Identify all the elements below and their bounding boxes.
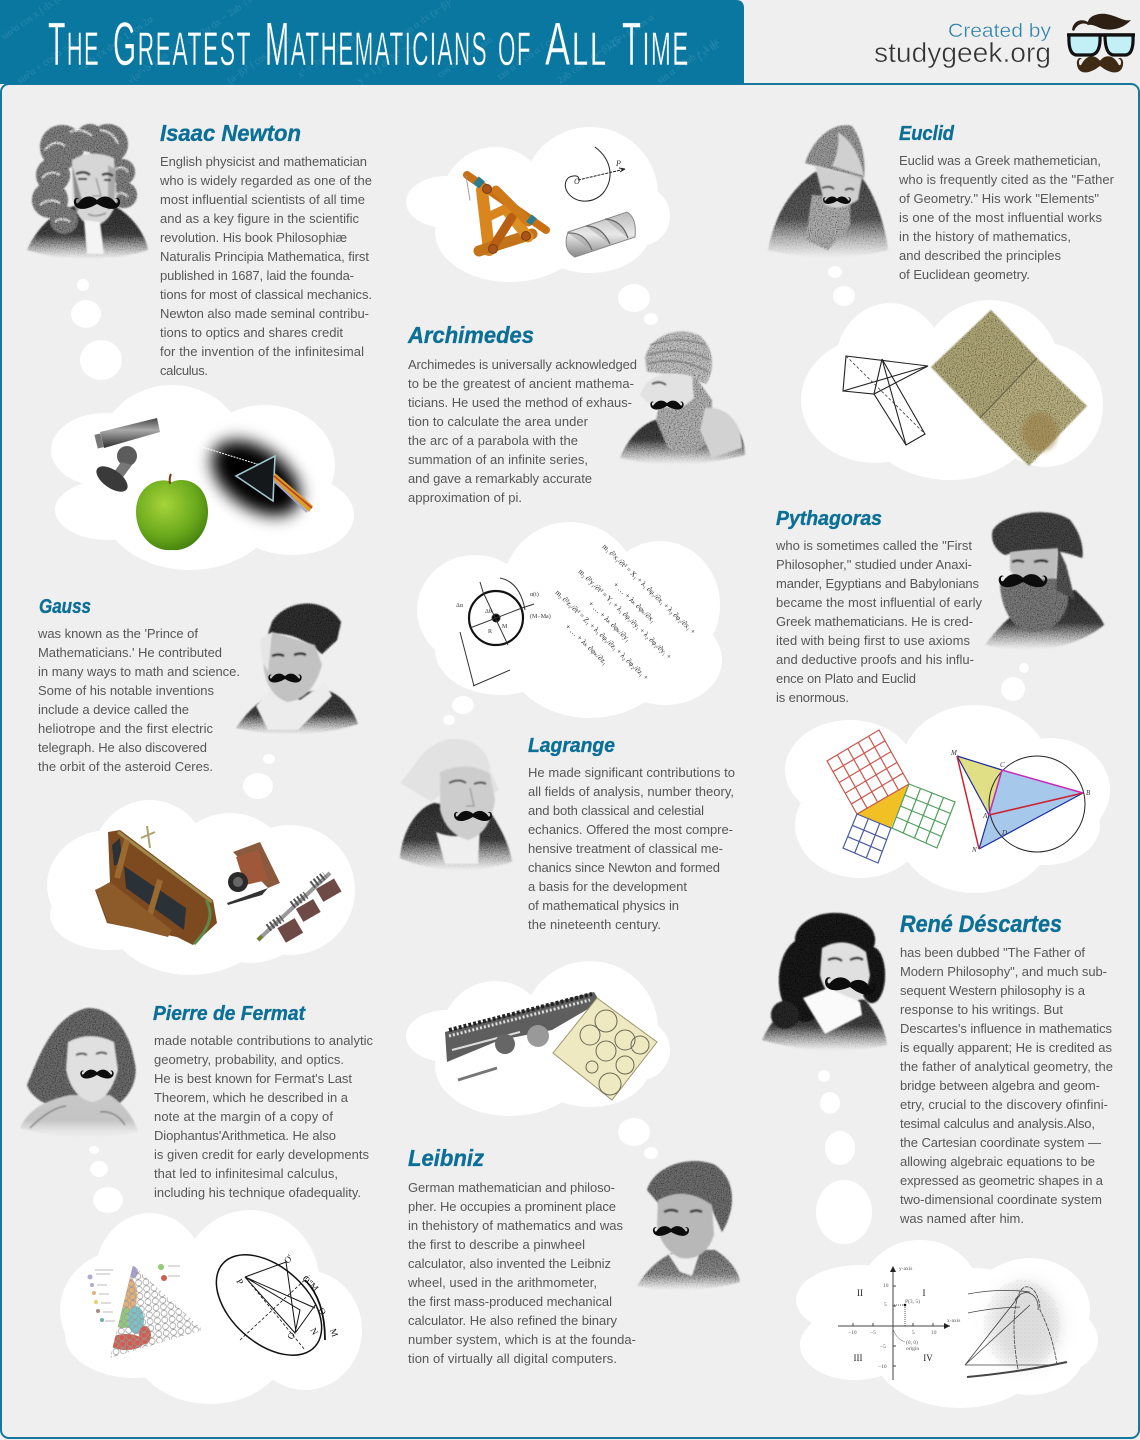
thought cloud: Newton (51, 385, 354, 570)
math texture: sin α − 2ab + 1 dx (655, 36, 721, 86)
text: Pythagoras: Philosopher," studied under Anaxi- (776, 557, 972, 572)
diagram: rotating disc (456, 578, 551, 686)
chart: coordinate plane: y-axis (899, 1266, 912, 1272)
text: Descartes: Modern Philosophy", and much sub- (900, 964, 1107, 979)
text: Newton: tions for most of classical mechanics. (160, 287, 372, 302)
text: Descartes: two-dimensional coordinate system (900, 1192, 1102, 1207)
math texture: √(a²+b²) sin x 25 (125, 39, 187, 86)
text: Euclid: Euclid was a Greek mathemetician, (899, 153, 1101, 168)
text: Descartes: etry, crucial to the discovery ofinfini- (900, 1097, 1108, 1112)
text: Archimedes: to be the greatest of ancient mathema- (408, 376, 634, 391)
thought cloud: equations of motion (417, 522, 722, 718)
header banner (0, 0, 744, 86)
title: OF (498, 22, 532, 75)
text: Fermat: note at the margin of a copy of (154, 1109, 333, 1124)
text: Lagrange (528, 765, 735, 932)
chart: coordinate plane: P(3, 5) (905, 1298, 920, 1305)
text: Descartes: the father of analytical geometry, the (900, 1059, 1113, 1074)
text: Leibniz: the first to describe a pinwheel (408, 1237, 585, 1252)
diagram: circle and triangle: B (1086, 789, 1091, 797)
chart: coordinate plane: IV (923, 1353, 933, 1363)
diagram: rotating disc: Δα (456, 603, 464, 609)
math texture: cos²α − 1 √x sin (435, 35, 494, 80)
diagram: rotating disc: Δθ (485, 609, 492, 615)
text: Pythagoras: and deductive proofs and his influ- (776, 652, 974, 667)
icon: prism (198, 425, 314, 531)
chart: coordinate plane: III (854, 1353, 862, 1363)
title: GREATEST (113, 10, 252, 78)
text: Archimedes: and gave a remarkably accurate (408, 471, 592, 486)
text: Fermat: Diophantus'Arithmetica. He also (154, 1128, 336, 1143)
chart: coordinate plane: II (857, 1288, 863, 1298)
text: Descartes: sequent Western philosophy is a (900, 983, 1086, 998)
text: Leibniz: the first mass-produced mechanical (408, 1294, 612, 1309)
diagram: Pythagorean squares (827, 730, 955, 863)
text: Archimedes: ticians. He used the method of exhaus- (408, 395, 632, 410)
text: Newton (159, 154, 372, 378)
text: Newton: calculus. (160, 363, 208, 378)
diagram: rotating disc: R (488, 629, 492, 635)
thought cloud: Fermat (60, 1210, 362, 1404)
heading: Archimedes: Archimedes (407, 322, 534, 348)
thought bubbles: Gauss (243, 754, 275, 799)
chart: coordinate plane: 5 (884, 1302, 887, 1308)
thought cloud: Descartes (796, 1240, 1098, 1408)
text: Descartes: response to his writings. But (900, 1002, 1063, 1017)
mustache (80, 1070, 114, 1079)
text: Pythagoras: became the most influential of early (776, 595, 982, 610)
text: Lagrange: echanics. Offered the most compre- (528, 822, 733, 837)
text: Leibniz: pher. He occupies a prominent place (408, 1199, 616, 1214)
thought bubbles: Fermat (89, 1146, 123, 1213)
credit: created by: studygeek.org (874, 37, 1051, 68)
credit: created by (874, 21, 1052, 68)
text: Newton: English physicist and mathematician (160, 154, 367, 169)
chart: coordinate plane: −5 (880, 1344, 886, 1350)
chart: coordinate plane: (0, 0) (906, 1339, 918, 1346)
text: Euclid: is one of the most influential works (899, 210, 1102, 225)
diagram: circle and triangle: D (1001, 829, 1007, 837)
portrait: Isaac Newton (27, 124, 148, 259)
icon: spiral (565, 147, 625, 201)
text: Pythagoras (775, 538, 982, 705)
text: Fermat (154, 1033, 374, 1200)
text: Fermat: Theorem, which he described in a (154, 1090, 349, 1105)
text: Euclid: and described the principles (899, 248, 1062, 263)
text: Leibniz: wheel, used in the arithmometer, (407, 1275, 597, 1290)
chart: coordinate plane: I (922, 1288, 926, 1298)
text: Lagrange: the nineteenth century. (528, 917, 661, 932)
text: Pythagoras: who is sometimes called the "First (775, 538, 972, 553)
text: Gauss: heliotrope and the first electric (38, 721, 214, 736)
text: Descartes: the Cartesian coordinate system — (900, 1135, 1101, 1150)
diagram: rotating disc: (M−Ma) (530, 613, 551, 620)
title: TIME (622, 10, 690, 78)
icon: electric telegraph (95, 826, 217, 945)
diagram: ellipse: O (285, 1330, 297, 1341)
icon: folding camera (227, 842, 280, 905)
portrait: Pierre de Fermat (20, 1008, 138, 1138)
thought bubbles: Newton (71, 279, 122, 380)
text: Euclid: in the history of mathematics, (899, 229, 1071, 244)
text: Gauss (37, 626, 240, 774)
math texture (0, 0, 721, 86)
math texture: −2ab √x dy = 1 cos 2α (75, 14, 156, 74)
text: Descartes: tesimal calculus and analysis.Also, (900, 1116, 1095, 1131)
text: Newton: Newton also made seminal contribu- (160, 306, 369, 321)
chart: coordinate plane: −10 (848, 1330, 857, 1336)
text: Gauss: Mathematicians.' He contributed (38, 645, 222, 660)
diagram: ellipse: P (234, 1277, 245, 1286)
text: Newton: tions to optics and shares credit (160, 325, 343, 340)
chart: coordinate plane: 5 (912, 1330, 915, 1336)
text: Euclid: of Euclidean geometry. (899, 267, 1030, 282)
thought cloud: Pythagoras (785, 705, 1110, 893)
thought cloud: Leibniz (406, 961, 670, 1116)
diagram: ellipse: O (316, 1306, 328, 1317)
text: Leibniz: tion of virtually all digital computers. (408, 1351, 617, 1366)
mustache (653, 1226, 689, 1236)
chart: coordinate plane: x-axis (947, 1318, 960, 1324)
text: Newton: who is widely regarded as one of the (159, 173, 372, 188)
text: Archimedes: summation of an infinite series, (408, 452, 588, 467)
diagram: ellipse (197, 1235, 341, 1375)
text: Archimedes: approximation of pi. (408, 490, 522, 505)
thought bubbles: Descartes (816, 1070, 872, 1244)
text: Descartes: is equally apparent; He is credited as (900, 1040, 1112, 1055)
text: Descartes: has been dubbed "The Father of (900, 945, 1085, 960)
text: Descartes: Descartes's influence in mathematics (900, 1021, 1112, 1036)
mustache (823, 196, 851, 204)
chart: coordinate plane: origin (906, 1346, 919, 1352)
chart: coordinate plane: 10 (931, 1330, 937, 1336)
math texture: (a−β)² ∫ cos x sin α (225, 34, 294, 86)
chart: coordinate plane: −5 (870, 1330, 876, 1336)
text: Leibniz: calculator, also invented the Leibniz (408, 1256, 611, 1271)
equations: + … + λₖ ∂φₖ/∂y₁ (587, 599, 633, 644)
diagram: circle and triangle: A (982, 812, 988, 820)
text: Gauss: include a device called the (38, 702, 189, 717)
diagram: circle and triangle (950, 749, 1091, 854)
equations: m₃ ∂²z₁/∂t² = Z₁ + λ₁ ∂φ₁/∂z₁ + λ₂ ∂φ₂/∂z₁ + (554, 588, 650, 682)
heading: René Déscartes: René Déscartes (900, 911, 1062, 938)
text: Descartes: expressed as geometric shapes in a (900, 1173, 1104, 1188)
thought cloud: Archimedes (406, 127, 670, 282)
diagram: ellipse: N (308, 1326, 320, 1337)
text: Fermat: is given credit for early developments (154, 1147, 370, 1162)
title: ALL (545, 10, 608, 78)
text: Lagrange: of mathematical physics in (528, 898, 679, 913)
text: Pythagoras: mander, Egyptians and Babylonians (776, 576, 980, 591)
text: Gauss: was known as the 'Prince of (37, 626, 198, 641)
credit: created by: Created by (948, 21, 1052, 42)
math texture: √(x²+1) cos α (605, 12, 657, 52)
text: Fermat: made notable contributions to analytic (154, 1033, 374, 1048)
text: Gauss: telegraph. He also discovered (38, 740, 207, 755)
text: Euclid: who is frequently cited as the "Father (898, 172, 1115, 187)
title: MATHEMATICIANS (265, 10, 488, 78)
diagram: geometric construction (843, 356, 928, 445)
portrait: Archimedes (620, 332, 745, 464)
text: Gauss: in many ways to math and science. (38, 664, 240, 679)
diagram: ellipse: O"M (301, 1273, 321, 1293)
text: Fermat: geometry, probability, and optics. (154, 1052, 344, 1067)
text: Newton: Naturalis Principia Mathematica, first (160, 249, 369, 264)
mustache (454, 811, 492, 821)
icon: Archimedes screw (566, 212, 635, 257)
icon: stepped reckoner (445, 992, 600, 1080)
text: Leibniz: calculator. He also refined the binary (408, 1313, 618, 1328)
text: Lagrange: He made significant contributions to (528, 765, 735, 780)
text: Descartes: bridge between algebra and geom- (900, 1078, 1100, 1093)
text: Lagrange: chanics since Newton and formed (528, 860, 720, 875)
text: Descartes: allowing algebraic equations to be (900, 1154, 1095, 1169)
text: Fermat: that led to infinitesimal calculus, (154, 1166, 338, 1181)
text: Descartes: was named after him. (899, 1211, 1024, 1226)
thought bubbles: Euclid (828, 266, 855, 306)
text: Descartes (899, 945, 1113, 1226)
equations (554, 542, 697, 682)
math texture: ∫ x² dt (695, 40, 721, 63)
text: Newton: for the invention of the infinitesimal (160, 344, 364, 359)
math texture: y = 1 ∫ dt 3x² −2 (355, 40, 415, 86)
heading: Pierre de Fermat: Pierre de Fermat (153, 1003, 306, 1025)
text: Pythagoras: ited with being first to use axioms (776, 633, 970, 648)
portrait: Pythagoras (985, 512, 1104, 650)
text: Euclid (898, 153, 1115, 282)
icon: spiral: P (615, 159, 621, 168)
text: Fermat: He is best known for Fermat's Last (154, 1071, 352, 1086)
math texture: tan α = sin α / cos α (495, 28, 567, 82)
icon: catapult (466, 175, 546, 254)
thought cloud: Gauss (47, 800, 355, 975)
text: Newton: published in 1687, laid the founda- (160, 268, 354, 283)
diagram: circle and triangle: N (971, 846, 977, 854)
thought bubbles: Leibniz (618, 1118, 658, 1159)
portrait: Euclid (768, 125, 888, 257)
portrait: Leibniz (637, 1161, 740, 1290)
equations: m₁ ∂²x₁/∂t² = X₁ + λ₁ ∂φ₁/∂x₁ + λ₂ ∂φ₂/∂x₁ + (601, 542, 697, 636)
text: Leibniz: in thehistory of mathematics and was (408, 1218, 624, 1233)
math texture: 2ab cos x (a−β) 25 (555, 35, 623, 86)
diagram: circle and triangle: C (1000, 761, 1005, 769)
heading: Euclid: Euclid (899, 123, 955, 145)
math texture: sin²α + cos²α = 1 x² (15, 33, 86, 86)
text: Newton: revolution. His book Philosophiæ (160, 230, 347, 245)
heading: Pythagoras: Pythagoras (776, 508, 882, 530)
text: Archimedes: tion to calculate the area under (408, 414, 589, 429)
text: Fermat: including his technique ofadequality. (154, 1185, 361, 1200)
text: Gauss: Some of his notable inventions (38, 683, 214, 698)
diagram: Pascal triangle (88, 1264, 203, 1358)
diagram: rotating disc: M (502, 624, 508, 630)
text: Leibniz: number system, which is at the founda- (408, 1332, 636, 1347)
heading: Gauss: Gauss (39, 596, 91, 618)
thought bubbles: Lagrange (443, 696, 474, 725)
chart: coordinate plane (838, 1266, 960, 1380)
portrait: René Descartes (762, 913, 887, 1050)
text: Lagrange: hensive treatment of classical me- (528, 841, 723, 856)
portrait: Lagrange (400, 739, 512, 870)
text: Pythagoras: is enormous. (776, 690, 849, 705)
diagram: ellipse: M (328, 1327, 340, 1338)
text: Archimedes (408, 357, 637, 505)
text: Pythagoras: Greek mathematicians. He is cred- (776, 614, 973, 629)
text: Gauss: the orbit of the asteroid Ceres. (38, 759, 213, 774)
text: Leibniz (407, 1180, 636, 1366)
thought bubbles: Pythagoras (1001, 663, 1029, 701)
text: Lagrange: a basis for the development (528, 879, 687, 894)
heading: Leibniz: Leibniz (408, 1145, 484, 1171)
text: Leibniz: German mathematician and philoso- (408, 1180, 615, 1195)
diagram: gear chart (553, 998, 657, 1100)
text: Lagrange: and both classical and celestial (528, 803, 704, 818)
thought bubbles: Archimedes (618, 284, 658, 325)
diagram: circle and triangle: M (950, 749, 958, 757)
icon: apple (136, 474, 208, 550)
equations: + … + λₖ ∂φₖ/∂z₁ (564, 622, 610, 667)
icon: telescope (92, 418, 160, 497)
text: Euclid: of Geometry." His work "Elements" (899, 191, 1099, 206)
text: Archimedes: Archimedes is universally acknowledged (408, 357, 637, 372)
mustache (74, 196, 120, 209)
text: Newton: most influential scientists of all time (160, 192, 365, 207)
mustache (268, 674, 302, 683)
icon: open book (931, 310, 1087, 466)
text: Pythagoras: ence on Plato and Euclid (776, 671, 916, 686)
equations: + … + λₖ ∂φₖ/∂x₁ (612, 580, 658, 625)
portrait: Gauss (236, 604, 358, 734)
icon: geek logo (1067, 14, 1135, 72)
text: Archimedes: the arc of a parabola with the (408, 433, 578, 448)
diagram: rotating disc: α(t) (530, 591, 539, 598)
text: Newton: and as a key figure in the scientific (160, 211, 360, 226)
mustache (824, 975, 876, 996)
diagram: ellipse: O' (282, 1252, 295, 1265)
heading: Isaac Newton: Isaac Newton (160, 120, 301, 146)
equations: m₂ ∂²y₁/∂t² = Y₁ + λ₁ ∂φ₁/∂y₁ + λ₂ ∂φ₂/∂y₁ + (577, 567, 673, 661)
chart: coordinate plane: −10 (878, 1364, 887, 1370)
heading: Lagrange: Lagrange (528, 735, 615, 757)
icon: spiral: O (574, 177, 580, 186)
chart: coordinate plane: 10 (883, 1283, 889, 1289)
icon: heliotrope coils (258, 873, 342, 943)
diagram: trajectory sketch (965, 1280, 1067, 1377)
title (48, 10, 690, 78)
title: THE (48, 10, 100, 78)
mustache (999, 574, 1047, 587)
thought cloud: Euclid (801, 300, 1103, 480)
math texture: x² + 3x − 2ab sin α (295, 28, 364, 80)
text: Lagrange: all fields of analysis, number theory, (528, 784, 734, 799)
mustache (650, 401, 684, 410)
